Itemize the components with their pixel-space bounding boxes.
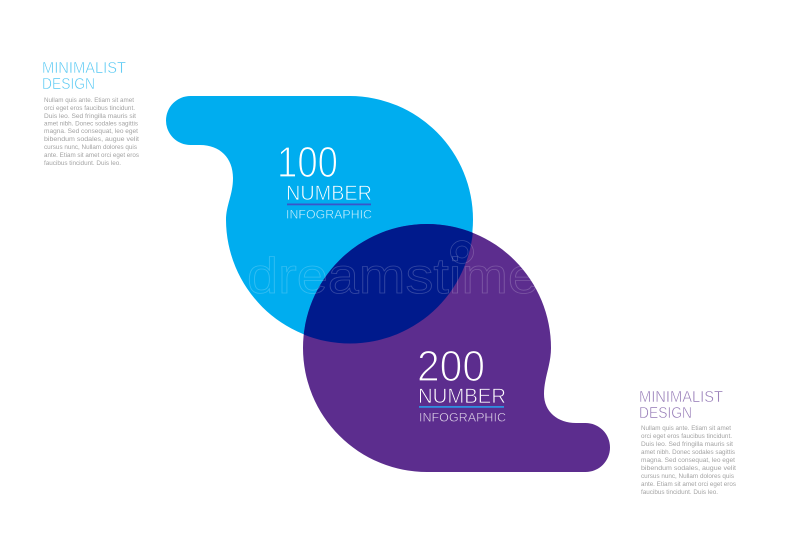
label: 200 number — [417, 342, 506, 424]
overlap lens — [304, 224, 473, 344]
text block: right paragraph: cursus nunc, Nullam dolores quis — [641, 473, 735, 480]
text block: left heading — [42, 60, 126, 93]
text block: right heading: MINIMALIST — [639, 389, 723, 406]
label: 100 number: 100 — [277, 138, 338, 187]
text block: right paragraph: ante. Etiam sit amet orci eget eros — [641, 481, 737, 488]
label: 100 number: NUMBER — [286, 182, 372, 205]
label: 100 number: INFOGRAPHIC — [286, 208, 372, 222]
text block: right paragraph: Nullam quis ante. Etiam sit amet — [641, 425, 731, 432]
text block: left paragraph: cursus nunc, Nullam dolores quis — [44, 144, 138, 151]
label: 200 number: 200 — [417, 342, 485, 391]
text block: left paragraph — [44, 97, 140, 167]
text block: left paragraph: orci eget eros faucibus tincidunt. — [44, 105, 135, 112]
label: 200 number: NUMBER — [418, 385, 506, 408]
text block: right paragraph: faucibus tincidunt. Duis leo. — [641, 489, 718, 496]
label: 200 number: INFOGRAPHIC — [419, 410, 506, 424]
text block: left paragraph: amet nibh. Donec sodales sagittis — [44, 120, 139, 128]
text block: right paragraph: bibendum sodales, augue velit — [641, 465, 736, 472]
text block: right heading: DESIGN — [639, 405, 692, 422]
text block: right paragraph: orci eget eros faucibus tincidunt. — [641, 433, 732, 440]
text block: left heading: DESIGN — [42, 76, 95, 93]
text block: left paragraph: bibendum sodales, augue velit — [44, 136, 139, 143]
text block: left paragraph: Duis leo. Sed fringilla mauris sit — [44, 113, 136, 120]
text block: right paragraph: amet nibh. Donec sodales sagittis — [641, 449, 736, 456]
watermark: dreamstime — [247, 248, 539, 304]
icon: watermark spiral — [450, 240, 474, 264]
label: 100 number — [277, 138, 372, 222]
text block: right heading — [639, 389, 723, 422]
text block: left paragraph: Nullam quis ante. Etiam sit amet — [44, 97, 134, 104]
text block: right paragraph: magna. Sed consequat, leo eget — [641, 457, 735, 464]
text block: left heading: MINIMALIST — [42, 60, 126, 77]
purple drop shape — [303, 224, 610, 472]
text block: right paragraph — [641, 425, 737, 496]
text block: left paragraph: magna. Sed consequat, leo eget — [44, 128, 138, 135]
blue drop shape — [166, 96, 473, 343]
text block: right paragraph: Duis leo. Sed fringilla mauris sit — [641, 441, 733, 448]
text block: left paragraph: ante. Etiam sit amet orci eget eros — [44, 152, 140, 159]
text block: left paragraph: faucibus tincidunt. Duis leo. — [44, 160, 121, 167]
